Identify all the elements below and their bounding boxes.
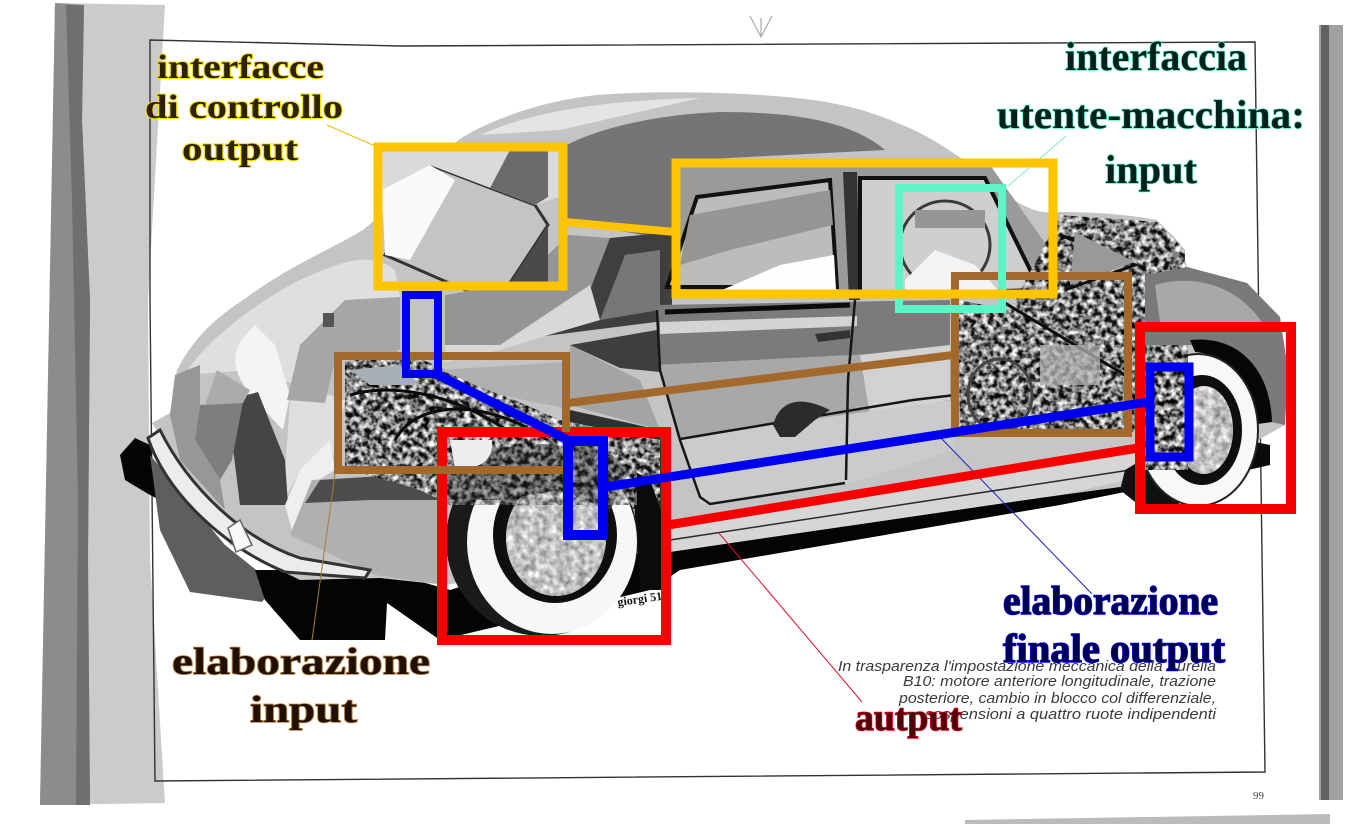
label: interfacce di controllo output — [145, 49, 343, 168]
scanned book gutter, left — [40, 3, 165, 805]
engine underside — [955, 432, 1135, 485]
label: interfacce di controllo output: interfacce — [157, 49, 324, 86]
label: interfaccia utente-macchina: input: input — [1105, 147, 1198, 192]
rear window — [385, 165, 548, 290]
ground shadow — [255, 470, 1135, 640]
front door frame — [672, 165, 1050, 295]
engine bay mechanics — [959, 215, 1185, 432]
leader lines — [312, 125, 1092, 702]
trunk light zone — [185, 260, 400, 503]
roof light streak — [480, 98, 700, 135]
artist signature: giorgi 51 — [616, 589, 663, 609]
scanned book edge, right — [965, 25, 1343, 824]
caption: posteriore, cambio in blocco col differenziale, — [898, 691, 1216, 707]
front window — [860, 178, 1040, 295]
caption — [838, 659, 1217, 723]
small marker — [323, 313, 334, 327]
label: elaborazione input: input — [250, 689, 357, 731]
label: autput: autput — [855, 697, 962, 739]
C pillar dark — [545, 232, 672, 336]
B pillar — [843, 172, 860, 300]
page number: 99 — [1253, 790, 1264, 802]
rear panel grey blocks — [195, 402, 243, 480]
caption: sospensioni a quattro ruote indipendenti — [925, 707, 1217, 723]
chrome highlight — [285, 440, 335, 530]
rear panel dark triangle — [232, 392, 288, 505]
label: elaborazione input — [172, 641, 430, 731]
black blob behind bumper — [120, 438, 160, 500]
steering wheel — [900, 201, 1000, 295]
label: elaborazione input: elaborazione — [172, 641, 430, 683]
label: elaborazione finale output — [1003, 578, 1226, 671]
frame: user-machine interface (teal) — [899, 188, 1002, 309]
car body silhouette — [152, 92, 1288, 585]
car illustration — [120, 92, 1288, 640]
rear lower body — [290, 472, 445, 585]
rear wheel — [446, 440, 668, 636]
fold mark at top — [750, 16, 772, 37]
light diagonal shoulder — [445, 285, 600, 362]
rear mechanics — [345, 350, 660, 509]
side window — [667, 180, 837, 287]
roof dark band — [558, 112, 885, 240]
door lines — [657, 300, 955, 504]
label: interfaccia utente-macchina: input — [997, 34, 1305, 192]
door lower — [680, 400, 955, 505]
door ornament — [773, 402, 830, 437]
frame group: final output processing (blue) — [406, 295, 1189, 535]
label: interfacce di controllo output: output — [182, 131, 299, 168]
frame group: control interfaces (yellow) — [378, 147, 1053, 294]
wheel arch dark — [570, 410, 668, 520]
trunk grey patch — [287, 297, 400, 403]
sill — [670, 450, 1135, 552]
door handle — [815, 330, 850, 342]
label: interfaccia utente-macchina: input: utente-macchina: — [997, 92, 1305, 137]
bumper — [148, 430, 370, 578]
door upper band — [657, 300, 950, 365]
label: elaborazione finale output: finale output — [1003, 626, 1226, 671]
rear quarter dark band — [445, 235, 640, 345]
dark panel under bumper — [150, 455, 275, 602]
front fender — [1145, 267, 1288, 425]
label: interfacce di controllo output: di controllo — [145, 89, 343, 126]
label: interfaccia utente-macchina: input: interfaccia — [1065, 34, 1247, 79]
caption: In trasparenza l'impostazione meccanica della Aurelia — [838, 659, 1216, 675]
caption: B10: motore anteriore longitudinale, trazione — [903, 674, 1216, 690]
frame group: output (red) — [442, 327, 1291, 640]
page frame — [150, 40, 1265, 781]
door middle — [660, 350, 955, 440]
label: elaborazione finale output: elaborazione — [1003, 578, 1218, 623]
wedge shadow — [570, 330, 660, 372]
frame group: input processing (brown) — [338, 276, 1128, 470]
front wheel — [1120, 345, 1270, 510]
